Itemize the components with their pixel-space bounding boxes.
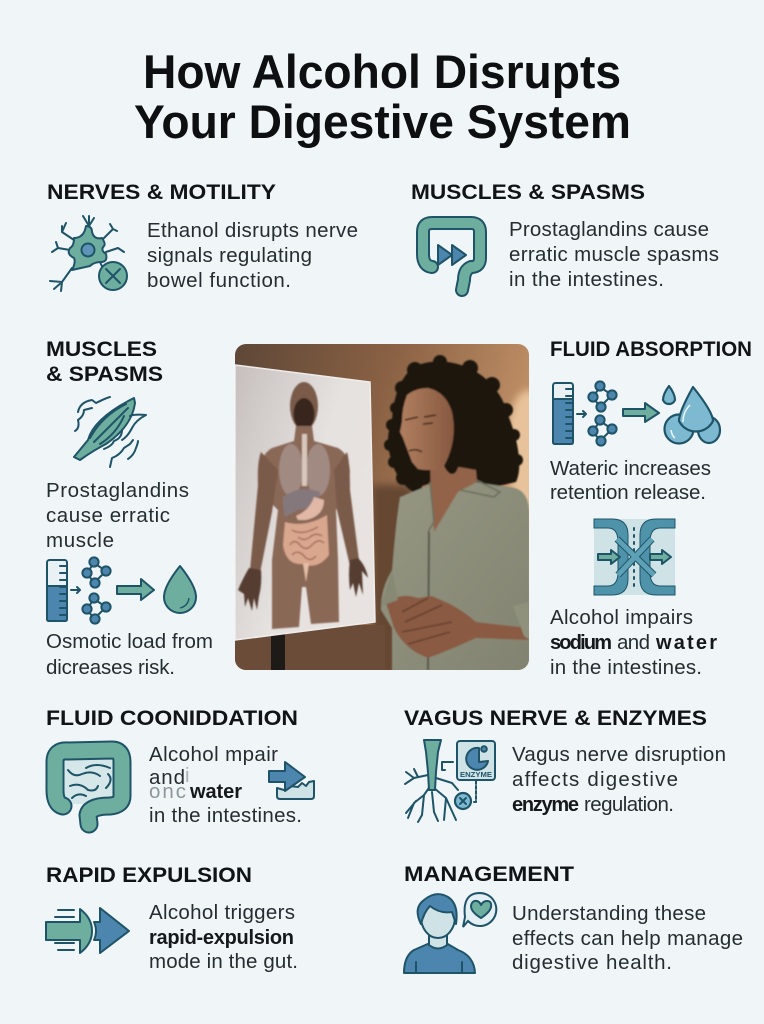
photo background wall [235,344,529,670]
text: alcohol mpair: in the intestines. [149,804,302,827]
text: alcohol mpair [149,743,302,827]
icon: neuron with cross [50,216,127,291]
text: prostaglandins: erratic muscle spasms [509,243,719,266]
text: understanding: effects can help manage [512,927,743,950]
icon: colon with contents [55,750,122,824]
shirt [381,482,530,672]
icon: osmotic load to drop [47,557,196,624]
text: alcohol impairs: and [617,631,650,654]
panel: management [404,863,743,974]
panel: nerves and motility [47,181,358,292]
text: prostaglandins: in the intestines. [509,268,664,291]
face [400,383,458,470]
text: understanding [512,902,743,974]
panel: fluid coonniddation [46,707,314,827]
text: prostaglandins left: Prostaglandins [46,479,189,502]
text: vagus: affects digestive [512,768,678,791]
text: wateric [550,457,711,504]
panel: muscles and spasms left [46,338,213,679]
text: alcohol impairs [550,606,717,679]
woman figure [381,355,530,672]
text: vagus: Vagus nerve disruption [512,743,726,766]
icon: arrow into water tray [269,762,314,799]
heading: rapid expulsion: RAPID EXPULSION [46,864,252,887]
text: osmotic load: dicreases risk. [46,656,175,679]
text: prostaglandins left [46,479,189,552]
heading: fluid coonniddation: FLUID COONIDDATION [46,707,298,730]
text: alcohol triggers [149,901,298,973]
text: prostaglandins left: cause erratic [46,504,170,527]
icon: vagus nerve with enzyme card [405,740,495,822]
text: prostaglandins: Prostaglandins cause [509,218,709,241]
heading: muscles and spasms left: MUSCLES [46,338,157,361]
text: osmotic load [46,630,213,679]
hair back [384,355,523,493]
text: alcohol mpair: Alcohol mpair [149,743,278,766]
hands and forearm [386,596,530,658]
title [134,45,631,148]
title: Your Digestive System [134,95,631,148]
text: ethanol: bowel function. [147,269,291,292]
anatomy poster [235,365,375,640]
collar and placket [428,480,500,532]
text: understanding: Understanding these [512,902,706,925]
front hair [407,382,460,475]
icon: speed arrows [46,908,129,953]
heading: fluid absorption: FLUID ABSORPTION [550,338,752,361]
panel: vagus nerve and enzymes [404,707,726,822]
heading: management: MANAGEMENT [404,863,574,886]
text: alcohol triggers: mode in the gut. [149,950,298,973]
text: ethanol [147,219,358,292]
text: alcohol impairs: in the intestines. [550,656,702,679]
text: alcohol mpair: onc [149,780,186,803]
heading: vagus nerve and enzymes: VAGUS NERVE & ENZYMES [404,707,707,730]
panel: rapid expulsion [46,864,298,973]
text: alcohol triggers: rapid-expulsion [149,927,294,949]
text: wateric: retention release. [550,481,706,504]
heading: muscles and spasms: MUSCLES & SPASMS [411,181,645,204]
icon: blocked intestinal channel [594,519,675,595]
panel: fluid absorption [550,338,752,679]
icon: colon with fast forward arrows [423,223,480,290]
text: wateric: Wateric increases [550,457,711,480]
text: alcohol mpair: i [185,764,190,787]
text: alcohol triggers: Alcohol triggers [149,901,295,924]
skin silhouette of figure [290,382,318,430]
heading: muscles and spasms left: & SPASMS [46,363,163,386]
text: prostaglandins [509,218,719,291]
text: vagus [512,743,726,816]
photo: woman looking at anatomy poster [235,344,550,675]
text: alcohol mpair: and [149,766,185,789]
text: understanding: digestive health. [512,951,672,974]
neck [430,462,477,532]
text: ethanol: Ethanol disrupts nerve [147,219,358,242]
heading: muscles and spasms left [46,338,163,386]
text: alcohol impairs: sodium [550,632,612,654]
heading: nerves and motility: NERVES & MOTILITY [47,181,276,204]
text: alcohol impairs: Alcohol impairs [550,606,693,629]
icon: muscle with spasm lines [74,397,146,467]
panel: muscles and spasms top right [411,181,719,291]
text: prostaglandins left: muscle [46,529,114,552]
text: vagus: enzyme [512,794,579,816]
text: alcohol mpair: water [189,781,242,803]
icon: person with heart speech bubble [404,893,496,973]
text: alcohol impairs: water [655,632,717,654]
text: ethanol: signals regulating [147,244,312,267]
icon: vagus nerve with enzyme card: ENZYME [460,770,492,779]
icon: cylinder, molecules and drops [553,381,720,446]
title: How Alcohol Disrupts [143,45,621,98]
text: osmotic load: Osmotic load from [46,630,213,653]
text: vagus: regulation. [584,793,674,816]
